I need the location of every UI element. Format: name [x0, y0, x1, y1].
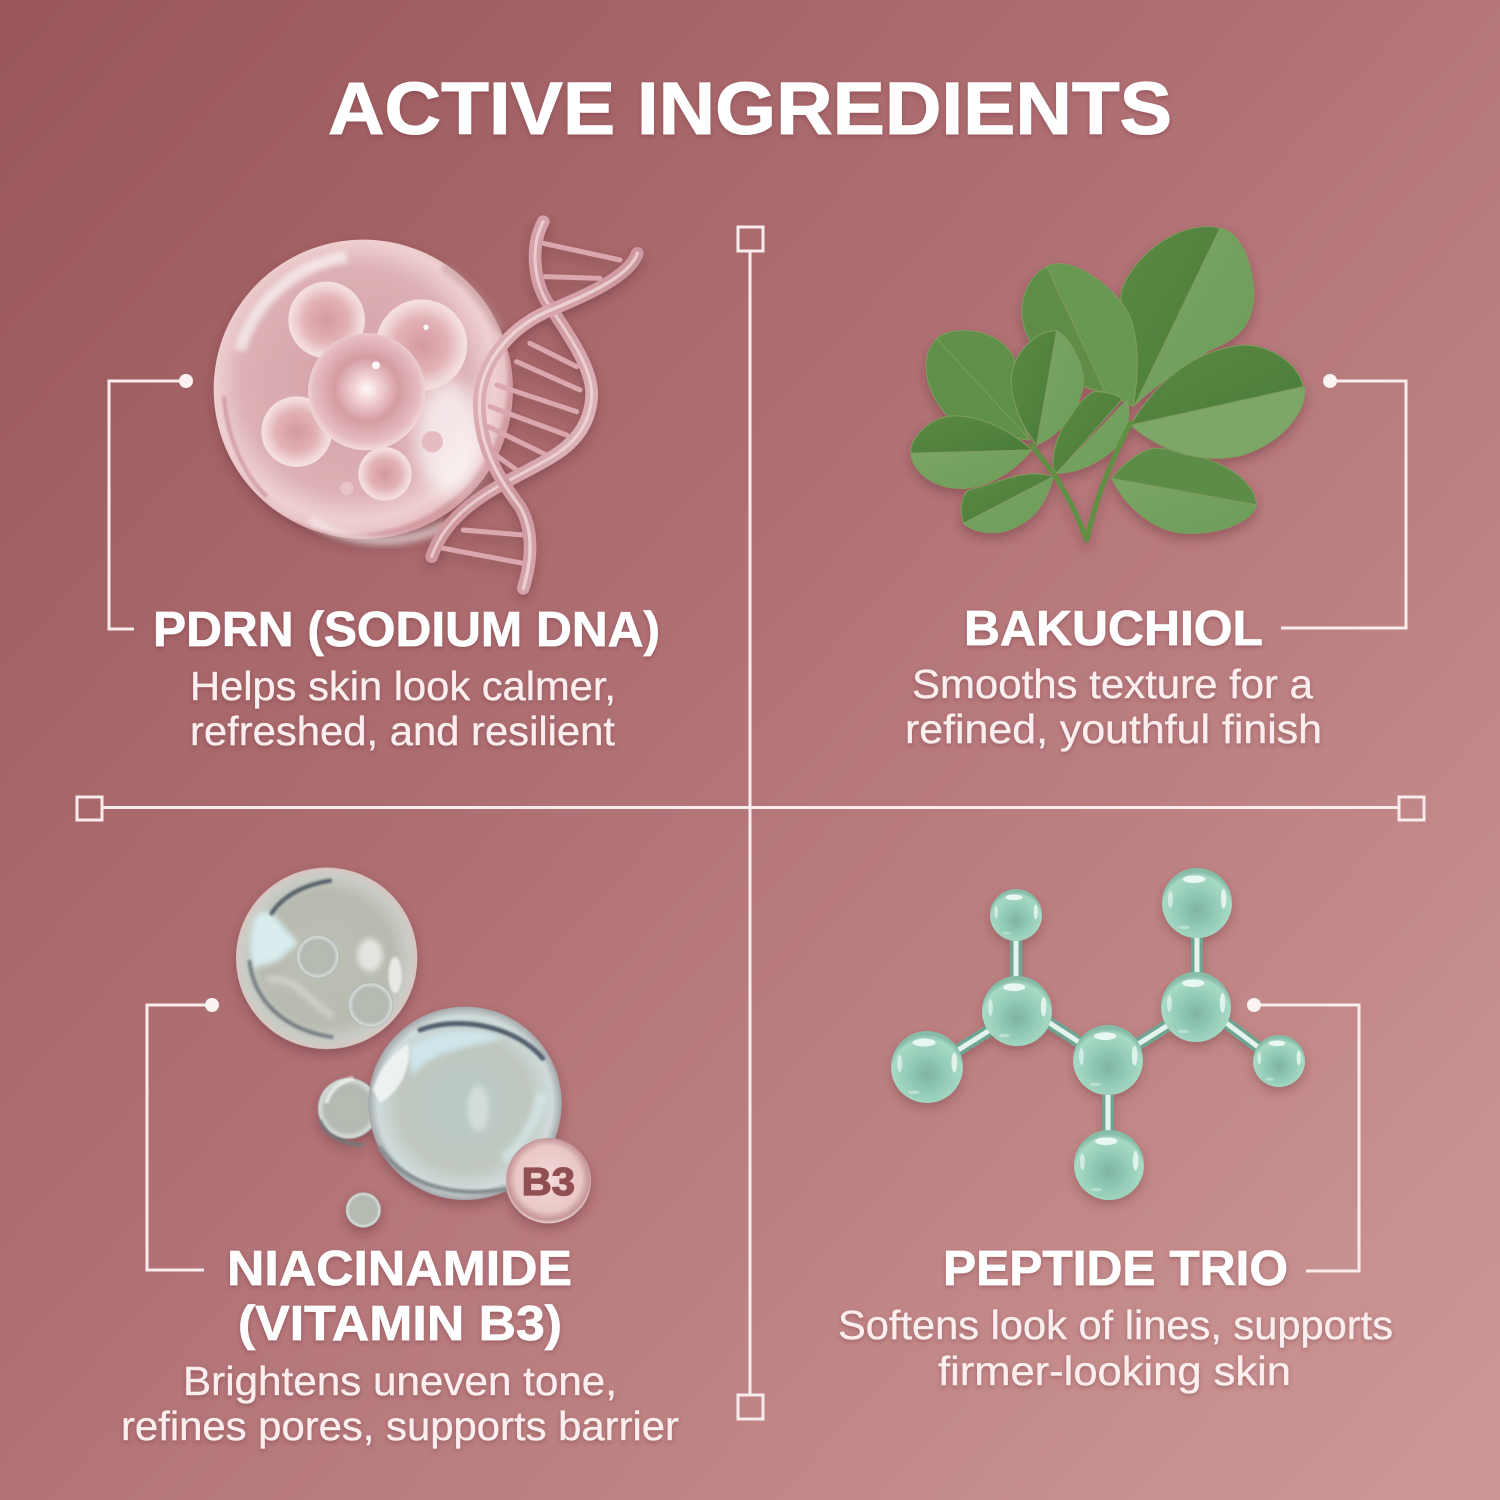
text: Peptide description: [838, 1302, 1393, 1394]
text: Bakuchiol description: refined, youthful finish: [905, 706, 1322, 752]
heading: Niacinamide: (VITAMIN B3): [238, 1297, 562, 1351]
connector: Bakuchiol: [1281, 374, 1406, 628]
bubble: large: [368, 1007, 562, 1200]
title: ACTIVE INGREDIENTS: [328, 67, 1172, 150]
text: PDRN description: Helps skin look calmer,: [190, 663, 616, 709]
icon: DNA helix: [432, 222, 637, 588]
text: Peptide description: Softens look of lines, supports: [838, 1302, 1393, 1348]
icon: large translucent sphere: [214, 240, 513, 540]
leaf: small centre: [1053, 392, 1129, 473]
leaf: upper left: [926, 330, 1030, 440]
bubble: upper: [236, 868, 417, 1049]
icon: B3 badge: [506, 1138, 591, 1223]
bubble: tiny: [346, 1192, 381, 1228]
quadrant divider cross: [77, 227, 1424, 1419]
connector: Niacinamide: [147, 998, 219, 1270]
bonds: [955, 935, 1262, 1135]
icon: B3 badge: B3: [522, 1160, 575, 1204]
icon: bakuchiol leaves: [911, 227, 1305, 540]
text: Niacinamide description: [121, 1358, 679, 1449]
text: Bakuchiol description: [905, 661, 1322, 752]
text: Niacinamide description: refines pores, supports barrier: [121, 1403, 679, 1449]
atoms: [891, 868, 1305, 1200]
heading: Peptide Trio: PEPTIDE TRIO: [943, 1242, 1288, 1296]
connector: Peptide: [1247, 998, 1359, 1271]
leaf: lower left: [961, 474, 1053, 533]
bubble: small behind: [318, 1078, 379, 1145]
text: Niacinamide description: Brightens uneven tone,: [183, 1358, 617, 1404]
text: PDRN description: [190, 663, 616, 754]
leaf: top middle: [1022, 264, 1137, 407]
leaf: left: [911, 416, 1032, 488]
connector: PDRN: [109, 374, 193, 629]
leaf: lower right: [1112, 448, 1257, 533]
icon: niacinamide bubbles: [236, 868, 591, 1228]
icon: PDRN sphere and DNA: [214, 222, 637, 588]
heading: Niacinamide: [227, 1242, 572, 1351]
leaf: top right: [1121, 227, 1254, 405]
text: Bakuchiol description: Smooths texture for a: [912, 661, 1313, 707]
leaf: small upper centre: [1011, 331, 1083, 445]
text: PDRN description: refreshed, and resilient: [190, 708, 616, 754]
icon: peptide molecule: [891, 868, 1305, 1200]
heading: PDRN: PDRN (SODIUM DNA): [153, 603, 660, 657]
heading: Bakuchiol: BAKUCHIOL: [964, 602, 1263, 656]
text: Peptide description: firmer-looking skin: [938, 1348, 1291, 1394]
leaf: right: [1131, 345, 1305, 458]
heading: Niacinamide: NIACINAMIDE: [227, 1242, 572, 1296]
leaf stems: [1032, 423, 1131, 540]
